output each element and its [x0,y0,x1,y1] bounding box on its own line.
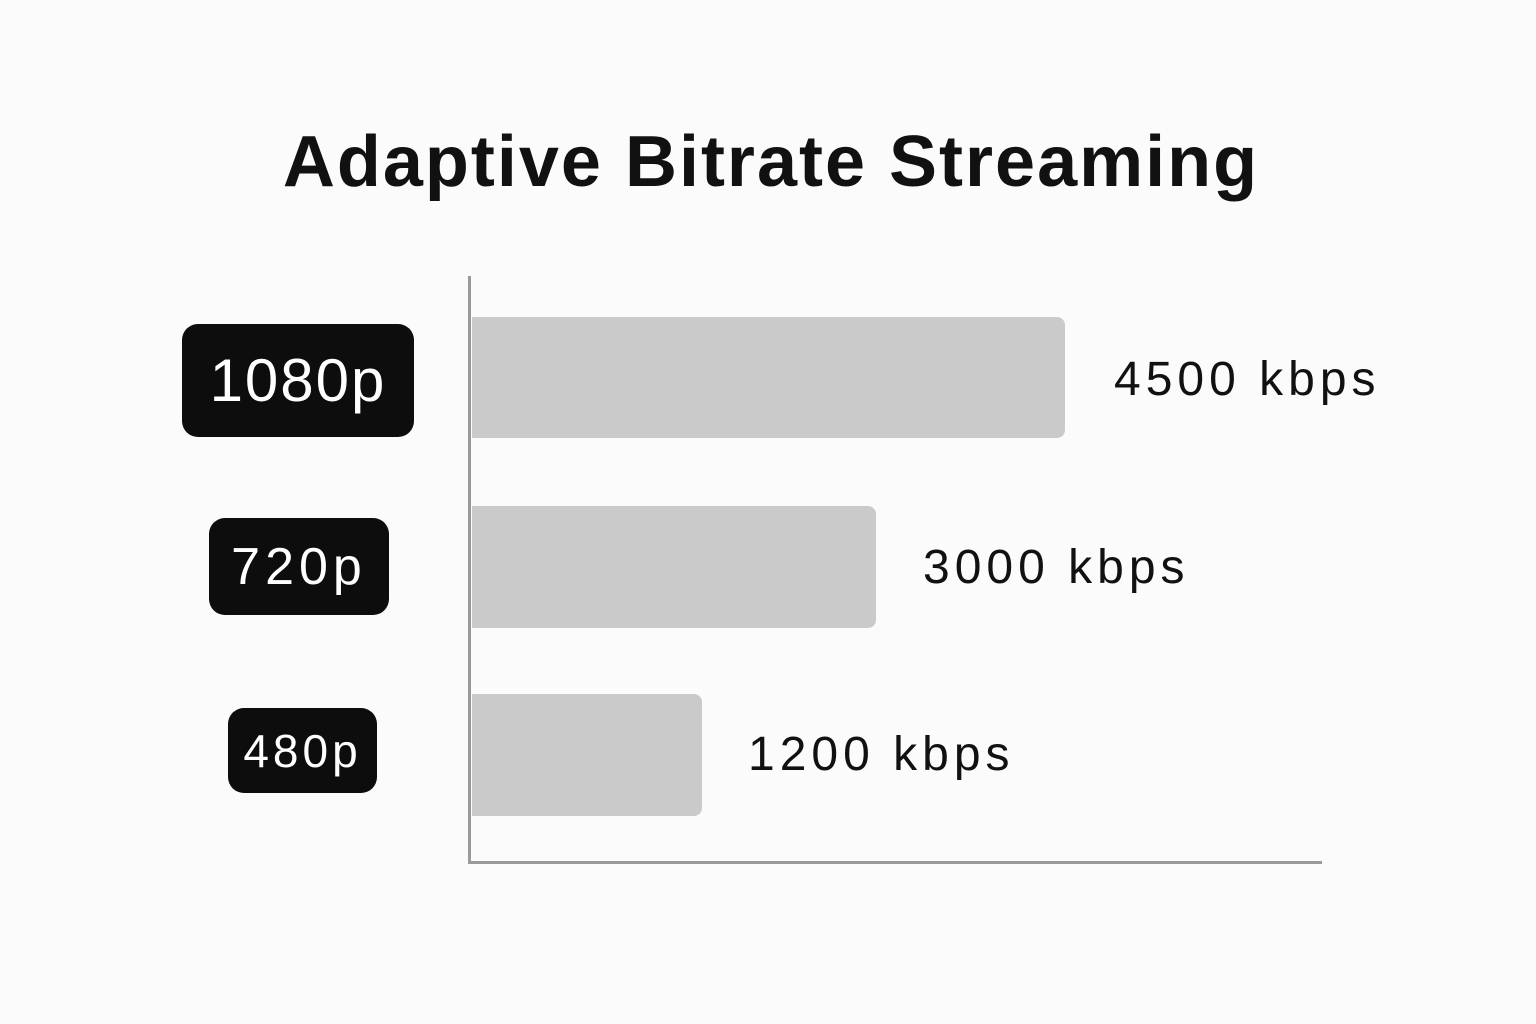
badge: 720p [209,518,389,615]
badge: 1080p [182,324,414,437]
bar: 480p [472,694,702,816]
axis: horizontal [468,861,1322,864]
axis: vertical [468,276,471,864]
value: 4500 kbps: 4500 kbps [1114,353,1381,406]
badge: 480p [228,708,377,793]
badge: 1080p: 1080p [210,347,386,414]
value: 3000 kbps: 3000 kbps [923,541,1190,594]
badge: 720p: 720p [231,538,367,596]
bar: 720p [472,506,876,628]
title: Adaptive Bitrate Streaming [283,122,1259,202]
bar: 1080p [472,317,1065,438]
badge: 480p: 480p [243,724,362,776]
value: 1200 kbps: 1200 kbps [748,728,1015,781]
